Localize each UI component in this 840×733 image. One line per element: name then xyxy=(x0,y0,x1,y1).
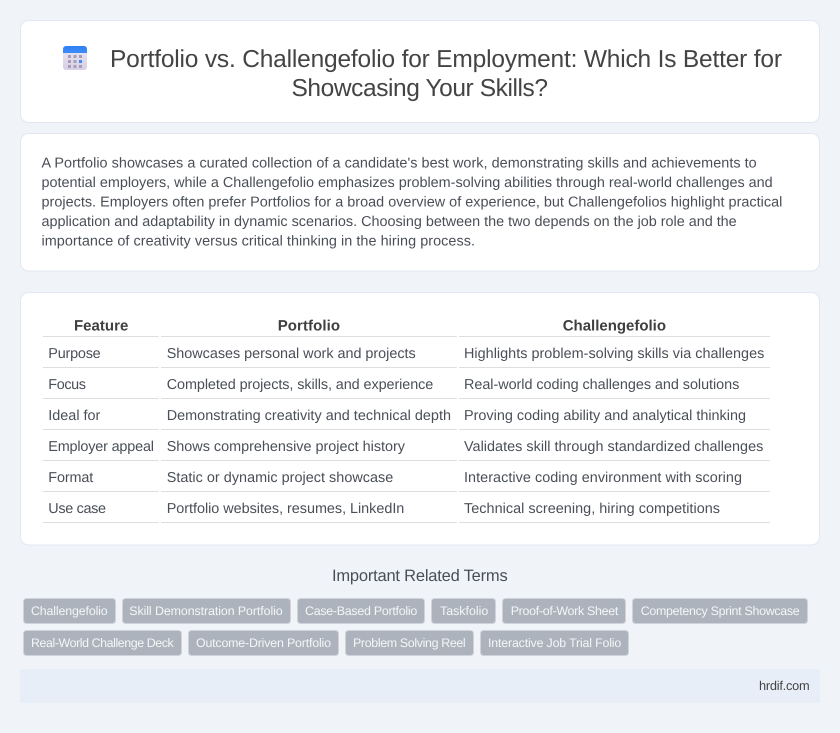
row: focus: Completed projects, skills, and experience xyxy=(167,377,433,393)
heading: important related terms: Important Related Terms xyxy=(332,567,508,585)
row: focus xyxy=(48,377,739,393)
text block: description xyxy=(42,156,782,250)
row: format: Static or dynamic project showcase xyxy=(167,470,393,486)
tag: Outcome-Driven Portfolio: Outcome-Driven Portfolio xyxy=(196,636,331,650)
row: focus: Real-world coding challenges and solutions xyxy=(464,377,739,393)
row: ideal for xyxy=(48,408,746,424)
row: focus: Focus xyxy=(48,377,86,393)
footer xyxy=(20,669,820,703)
tag: Competency Sprint Showcase xyxy=(632,598,808,624)
row: use case: Portfolio websites, resumes, LinkedIn xyxy=(167,501,404,517)
tag: Interactive Job Trial Folio xyxy=(480,630,628,656)
tag: Real-World Challenge Deck xyxy=(24,630,182,656)
row: format: Interactive coding environment with scoring xyxy=(464,470,742,486)
tag: Interactive Job Trial Folio: Interactive Job Trial Folio xyxy=(488,636,621,650)
table rules xyxy=(43,336,770,523)
text block: description: A Portfolio showcases a curated collection of a candidate's best work, demonstrating skills and achievements to xyxy=(42,156,757,172)
table header row: Challengefolio xyxy=(563,318,666,334)
panel: comparison table xyxy=(20,292,820,545)
row: use case xyxy=(48,501,720,517)
text block: description: importance of creativity versus critical thinking in the hiring process. xyxy=(42,234,475,250)
title: Portfolio vs. Challengefolio for Employment: Which Is Better for xyxy=(110,46,782,73)
tag: Problem Solving Reel: Problem Solving Reel xyxy=(353,636,466,650)
row: format: Format xyxy=(48,470,93,486)
tag: Skill Demonstration Portfolio: Skill Demonstration Portfolio xyxy=(129,604,283,618)
row: employer appeal: Shows comprehensive project history xyxy=(167,439,406,455)
tag: Competency Sprint Showcase: Competency Sprint Showcase xyxy=(641,604,800,618)
section: related terms xyxy=(24,567,808,656)
tag: Challengefolio: Challengefolio xyxy=(31,604,108,618)
tag: Proof-of-Work Sheet: Proof-of-Work Sheet xyxy=(511,604,619,618)
text block: description: projects. Employers often prefer Portfolios for a broad overview of experience, but Challengefolios highlight practical xyxy=(42,195,782,211)
tag: Taskfolio: Taskfolio xyxy=(440,604,488,618)
icon: calendar xyxy=(63,46,87,70)
row: use case: Technical screening, hiring competitions xyxy=(464,501,720,517)
row: ideal for: Demonstrating creativity and technical depth xyxy=(167,408,451,424)
row: ideal for: Ideal for xyxy=(48,408,101,424)
table header row: Feature xyxy=(74,318,128,334)
text block: description: application and adaptability in dynamic scenarios. Choosing between the two depends on the job role and the xyxy=(42,214,737,230)
title xyxy=(110,46,782,102)
row: use case: Use case xyxy=(48,501,106,517)
tag: Case-Based Portfolio: Case-Based Portfolio xyxy=(305,604,417,618)
text block: description: potential employers, while a Challengefolio emphasizes problem-solving abilities through real-world challenges and xyxy=(42,175,773,191)
tag: Case-Based Portfolio xyxy=(298,598,424,624)
row: format xyxy=(48,470,742,486)
tag: Skill Demonstration Portfolio xyxy=(122,598,290,624)
table header row: Portfolio xyxy=(278,318,340,334)
row: employer appeal: Validates skill through standardized challenges xyxy=(464,439,763,455)
row: purpose xyxy=(48,346,764,362)
row: purpose: Purpose xyxy=(48,346,101,362)
footer source text: hrdif.com xyxy=(759,678,810,693)
tag: Problem Solving Reel xyxy=(346,630,474,656)
row: purpose: Highlights problem-solving skills via challenges xyxy=(464,346,764,362)
tag: Taskfolio xyxy=(432,598,496,624)
row: employer appeal: Employer appeal xyxy=(48,439,154,455)
tag: Proof-of-Work Sheet xyxy=(502,598,626,624)
panel: description xyxy=(20,134,820,271)
panel: header xyxy=(20,20,820,122)
tag: Outcome-Driven Portfolio xyxy=(188,630,338,656)
row: employer appeal xyxy=(48,439,763,455)
row: ideal for: Proving coding ability and analytical thinking xyxy=(464,408,746,424)
tag: Real-World Challenge Deck: Real-World Challenge Deck xyxy=(31,636,174,650)
tag: Challengefolio xyxy=(24,598,116,624)
row: purpose: Showcases personal work and projects xyxy=(167,346,416,362)
title: Showcasing Your Skills? xyxy=(292,75,548,102)
table header row xyxy=(74,318,666,334)
